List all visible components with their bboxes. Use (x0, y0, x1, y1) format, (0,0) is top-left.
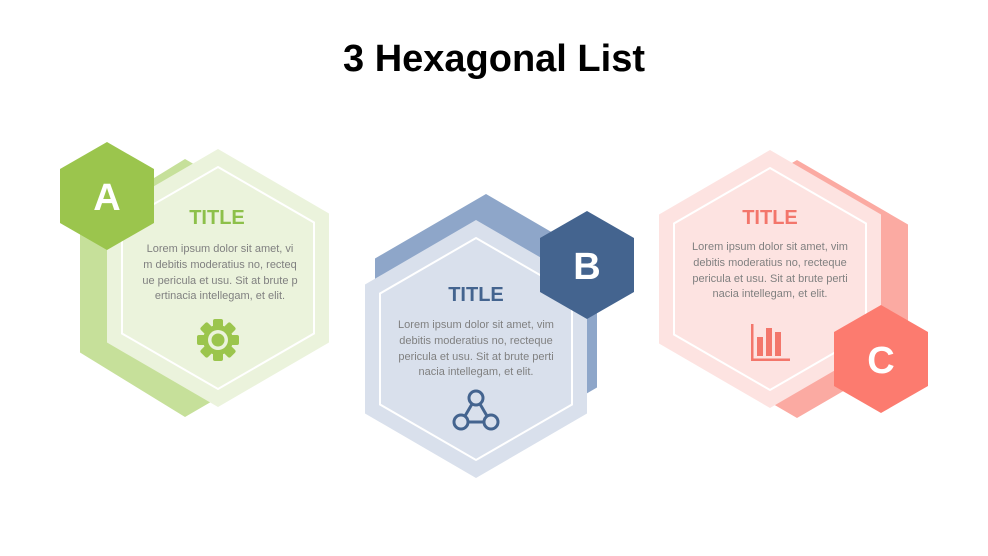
text C: debitis moderatius no, recteque (693, 257, 847, 269)
text B: debitis moderatius no, recteque (399, 335, 553, 347)
heading C: TITLE (742, 207, 798, 229)
icon: network (454, 391, 498, 429)
icon: bar chart (751, 324, 790, 361)
icon: gear (197, 319, 239, 361)
text A: ertinacia intellegam, et elit. (155, 290, 285, 302)
panel: C (659, 150, 928, 418)
title: 3 Hexagonal List (343, 38, 645, 80)
text B: Lorem ipsum dolor sit amet, vim (398, 319, 554, 331)
text B: nacia intellegam, et elit. (419, 366, 533, 378)
badge B (540, 211, 634, 319)
text C: pericula et usu. Sit at brute perti (692, 273, 848, 285)
text C: Lorem ipsum dolor sit amet, vim (692, 241, 848, 253)
text C: nacia intellegam, et elit. (713, 288, 827, 300)
text B: pericula et usu. Sit at brute perti (398, 351, 554, 363)
panel: A (60, 142, 329, 417)
panel: B (365, 194, 634, 478)
badge A: A (93, 177, 121, 219)
badge C (834, 305, 928, 413)
text A: Lorem ipsum dolor sit amet, vi (147, 243, 293, 255)
badge C: C (867, 340, 895, 382)
badge B: B (573, 246, 601, 288)
text A: m debitis moderatius no, recteq (143, 259, 297, 271)
heading A: TITLE (189, 207, 245, 229)
heading B: TITLE (448, 284, 504, 306)
badge A (60, 142, 154, 250)
text A: ue pericula et usu. Sit at brute p (142, 275, 298, 287)
